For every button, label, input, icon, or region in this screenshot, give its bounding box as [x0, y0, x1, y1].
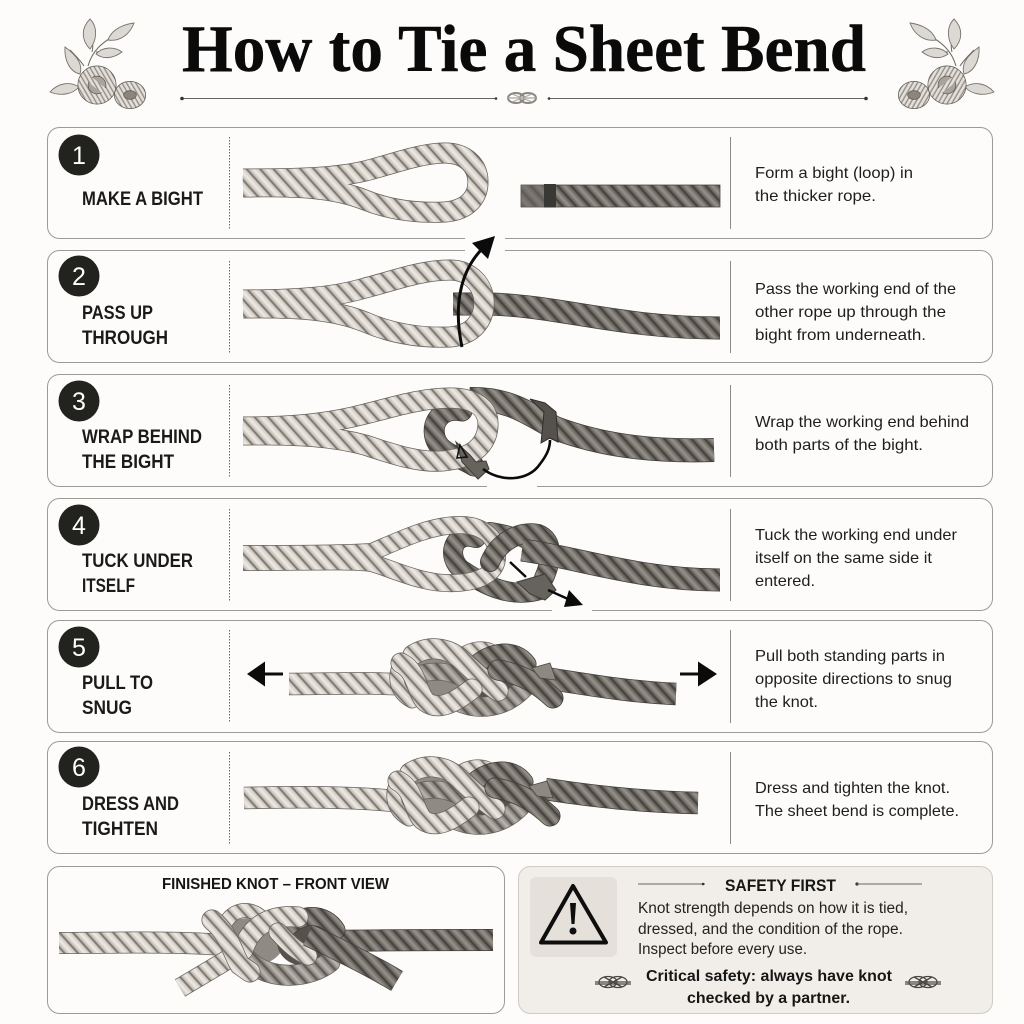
safety heading [638, 876, 922, 895]
step 3 description [755, 414, 969, 454]
icon: small knot right [905, 976, 941, 988]
step 4 rope: dark ring and tail behind [453, 530, 540, 593]
step 4 number: 4 [72, 512, 86, 540]
step 6 rope: standing parts [244, 789, 698, 803]
step 1 rope: bight in thick rope [243, 153, 478, 212]
safety body text [638, 900, 908, 958]
step 3 description: both parts of the bight. [755, 437, 923, 454]
step 3 label: WRAP BEHIND [82, 427, 202, 448]
panel: safety first [518, 866, 992, 1014]
step 3 description: Wrap the working end behind [755, 414, 969, 431]
step 4 number [58, 504, 100, 546]
arrow: up through the bight [458, 234, 505, 347]
step 2 label: PASS UP [82, 303, 153, 324]
step 4 label [82, 551, 193, 597]
safety body text: dressed, and the condition of the rope. [638, 921, 903, 938]
panel: step 4 [48, 498, 992, 623]
safety body text: Knot strength depends on how it is tied, [638, 900, 908, 917]
step 1 description: the thicker rope. [755, 188, 876, 205]
critical safety note [646, 968, 893, 1007]
safety body text: Inspect before every use. [638, 941, 807, 958]
safety heading: SAFETY FIRST [725, 876, 837, 895]
step 5 description: opposite directions to snug [755, 671, 952, 688]
step 3 rope: dark rope wrapping behind [434, 399, 714, 466]
critical safety note: checked by a partner. [687, 990, 850, 1007]
step 4 description: entered. [755, 573, 815, 590]
panel: step 2 [48, 250, 992, 362]
step 1 label: MAKE A BIGHT [82, 189, 203, 210]
step 3 label [82, 427, 202, 473]
step 5 label: PULL TO [82, 673, 153, 694]
step 6 description [755, 780, 959, 820]
step 1 number [58, 134, 100, 176]
icon: right leaf and rope ornament [903, 19, 994, 104]
step 2 description: bight from underneath. [755, 327, 926, 344]
step 2 rope: bight [243, 270, 484, 337]
step 4 description: Tuck the working end under [755, 527, 958, 544]
icon: small knot left [595, 976, 631, 988]
step 4 label: TUCK UNDER [82, 551, 193, 572]
arrow: wrap behind bight [457, 440, 550, 490]
step 3 label: THE BIGHT [82, 452, 174, 473]
finished knot heading: FINISHED KNOT – FRONT VIEW [162, 876, 390, 893]
step 3 wrap band [530, 399, 558, 443]
step 5 number [58, 626, 100, 668]
step 6 description: Dress and tighten the knot. [755, 780, 950, 797]
step 2 description: other rope up through the [755, 304, 946, 321]
step 2 label [82, 303, 168, 349]
step 2 label: THROUGH [82, 328, 168, 349]
step 5 rope: standing parts [289, 678, 676, 694]
step 3 number: 3 [72, 388, 86, 416]
icon: left leaf and rope ornament [50, 19, 141, 104]
step 5 knot [397, 648, 556, 707]
step 3 working end [456, 442, 489, 479]
step 2 number: 2 [72, 263, 86, 291]
step 2 description [755, 281, 956, 344]
step 5 description [755, 648, 952, 711]
panel: step 6 [48, 742, 992, 854]
panel: step 1 [48, 128, 992, 238]
step 5 label: SNUG [82, 698, 132, 719]
step 2 description: Pass the working end of the [755, 281, 956, 298]
panel: finished knot front view [48, 866, 504, 1014]
panel: step 3 [48, 374, 992, 490]
step 1 number: 1 [72, 142, 86, 170]
step 3 rope: bight [243, 398, 488, 461]
finished knot illustration [59, 910, 493, 988]
step 6 description: The sheet bend is complete. [755, 803, 959, 820]
step 4 description: itself on the same side it [755, 550, 933, 567]
step 6 knot [394, 766, 553, 825]
step 2 rope: dark rope through bight [453, 304, 720, 328]
icon: warning triangle [530, 877, 617, 957]
title rule with knot ornament [180, 93, 868, 103]
step 2 number [58, 256, 100, 296]
step 1 rope: thinner dark rope [521, 184, 720, 208]
title: How to Tie a Sheet Bend [182, 12, 866, 86]
step 6 number [58, 746, 100, 788]
step 6 label: TIGHTEN [82, 819, 158, 840]
step 5 arrow: pull left [247, 662, 283, 686]
step 6 label [82, 794, 179, 840]
step 6 label: DRESS AND [82, 794, 179, 815]
step 6 number: 6 [72, 754, 86, 782]
step 5 number: 5 [72, 634, 86, 662]
step 5 description: the knot. [755, 694, 818, 711]
panel: step 5 [48, 620, 992, 732]
critical safety note: Critical safety: always have knot [646, 968, 893, 985]
step 4 description [755, 527, 958, 590]
arrow: tuck direction [510, 562, 592, 623]
step 4 label: ITSELF [82, 576, 135, 597]
step 5 arrow: pull right [680, 662, 717, 686]
step 5 description: Pull both standing parts in [755, 648, 945, 665]
step 1 description: Form a bight (loop) in [755, 165, 913, 182]
step 5 label [82, 673, 153, 719]
step 4 rope: dark standing part over bight [490, 533, 720, 600]
step 1 description [755, 165, 913, 205]
step 4 rope: bight [243, 525, 497, 583]
step 3 number [58, 380, 100, 422]
